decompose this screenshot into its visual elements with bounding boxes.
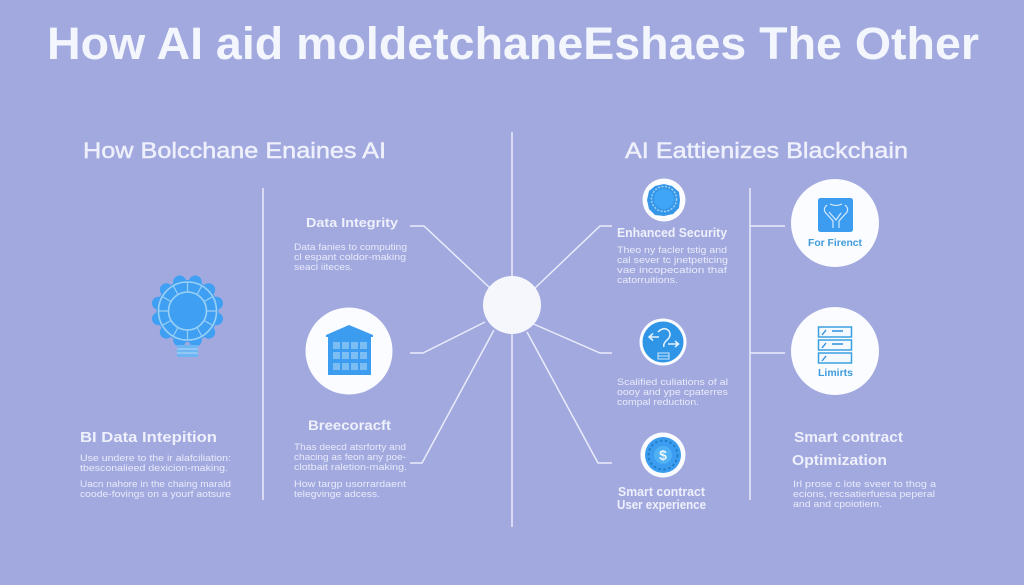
icon: for finance badge — [791, 179, 879, 267]
block: scalified: compal reduction. — [617, 397, 699, 408]
icon: gear with base — [152, 276, 223, 357]
block: BI data: BI Data Intepition — [80, 429, 217, 446]
right divider — [749, 188, 751, 500]
icon: dollar badge: $ — [659, 447, 667, 463]
block: breecoracft: Breecoracft — [308, 417, 391, 433]
block: smart contract optimization: ecions, recsatierfuesa peperal — [793, 489, 935, 500]
block: breecoracft: telegvinge adcess. — [294, 489, 380, 500]
block: data integrity: Data fanies to computing — [294, 242, 407, 253]
block: smart contract user experience — [617, 485, 706, 512]
heading: right column: AI Eattienizes Blackchain — [625, 138, 908, 163]
block: breecoracft: clotbait raletion-making. — [294, 462, 407, 473]
block: smart contract optimization: Irl prose c lote sveer to thog a — [793, 479, 937, 490]
block: enhanced security: vae incopecation thaf — [617, 265, 727, 276]
block: smart contract optimization: Optimization — [792, 453, 887, 469]
centre divider — [511, 132, 513, 527]
block: BI data: tbesconalieed dexicion-making. — [80, 463, 228, 474]
block: BI data — [80, 429, 231, 500]
block: enhanced security — [617, 225, 728, 286]
block: breecoracft: Thas deecd atsrforty and — [294, 442, 406, 453]
block: BI data: Uacn nahore in the chaing marald — [80, 479, 231, 490]
block: breecoracft: chacing as feon any poe- — [294, 452, 406, 463]
block: data integrity: seacl iiteces. — [294, 262, 353, 273]
block: smart contract optimization — [792, 430, 937, 510]
block: smart contract user experience: User experience — [617, 498, 706, 512]
heading: left column: How Bolcchane Enaines AI — [83, 138, 386, 163]
block: enhanced security: catorruitions. — [617, 275, 678, 286]
icon: gear badge — [642, 178, 686, 222]
title: How AI aid moldetchaneEshaes The Other — [47, 18, 979, 69]
icon: arrows badge — [640, 318, 686, 366]
block: data integrity — [294, 215, 407, 273]
icon: limits badge — [791, 307, 879, 395]
block: smart contract user experience: Smart contract — [618, 485, 706, 499]
block: smart contract optimization: Smart contract — [794, 430, 903, 446]
block: scalified — [617, 377, 728, 408]
block: enhanced security: cal sever tc jnetpeticing — [617, 255, 728, 266]
block: enhanced security: Theo ny facler tstig and — [617, 245, 727, 256]
block: scalified: Scalified culiations of al — [617, 377, 728, 388]
block: scalified: oooy and ype cpaterres — [617, 387, 728, 398]
block: breecoracft: How targp usorrardaent — [294, 479, 406, 490]
block: data integrity: Data Integrity — [306, 215, 399, 230]
icon: building in circle — [306, 308, 392, 394]
connector lines — [410, 226, 785, 463]
block: BI data: coode-fovings on a yourf aotsure — [80, 489, 231, 500]
icon: for finance badge: For Firenct — [808, 237, 862, 249]
icon: dollar badge — [640, 432, 686, 478]
block: enhanced security: Enhanced Security — [617, 225, 728, 240]
icon: limits badge: Limirts — [818, 367, 853, 379]
left divider — [262, 188, 264, 500]
block: smart contract optimization: and and cpoiotiem. — [793, 499, 882, 510]
block: BI data: Use undere to the ir alafciliation: — [80, 453, 231, 464]
block: data integrity: cl espant coldor-making — [294, 252, 406, 263]
central hub — [483, 276, 541, 334]
block: breecoracft — [294, 417, 407, 500]
